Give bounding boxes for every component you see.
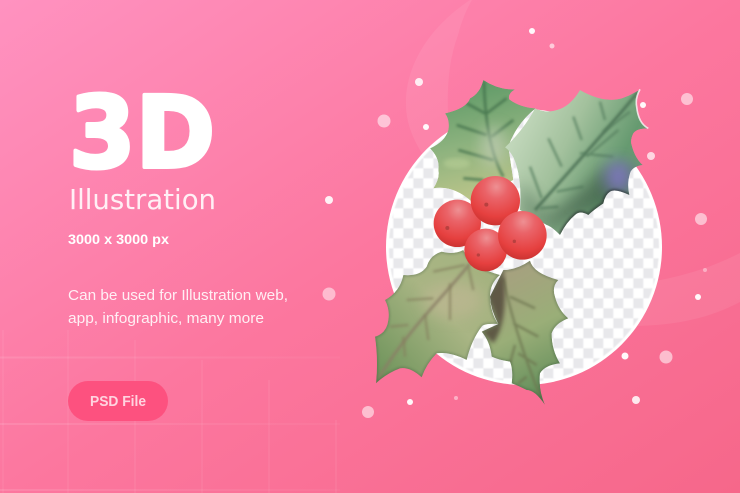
background glow crescent	[406, 0, 472, 165]
button: PSD File: PSD File	[90, 394, 146, 410]
leaf: top right	[505, 89, 648, 237]
description text: Can be used for Illustration web,	[68, 287, 288, 304]
leaf: bottom left	[375, 250, 500, 383]
title: 3D: 3D	[69, 76, 215, 191]
button: PSD File	[68, 381, 168, 421]
transparency checker circle	[386, 109, 662, 385]
leaf highlight edge	[636, 89, 648, 128]
size label: 3000 x 3000 px	[68, 231, 169, 247]
background glow wave	[630, 253, 740, 326]
subtitle: Illustration: Illustration	[69, 183, 216, 216]
snow dots	[322, 28, 707, 418]
description text	[68, 287, 288, 327]
leaf: top left	[430, 80, 536, 202]
description text: app, infographic, many more	[68, 310, 264, 327]
holly illustration	[375, 80, 648, 405]
background grid	[0, 330, 340, 493]
leaf: bottom right	[482, 261, 568, 405]
berries	[434, 176, 547, 271]
